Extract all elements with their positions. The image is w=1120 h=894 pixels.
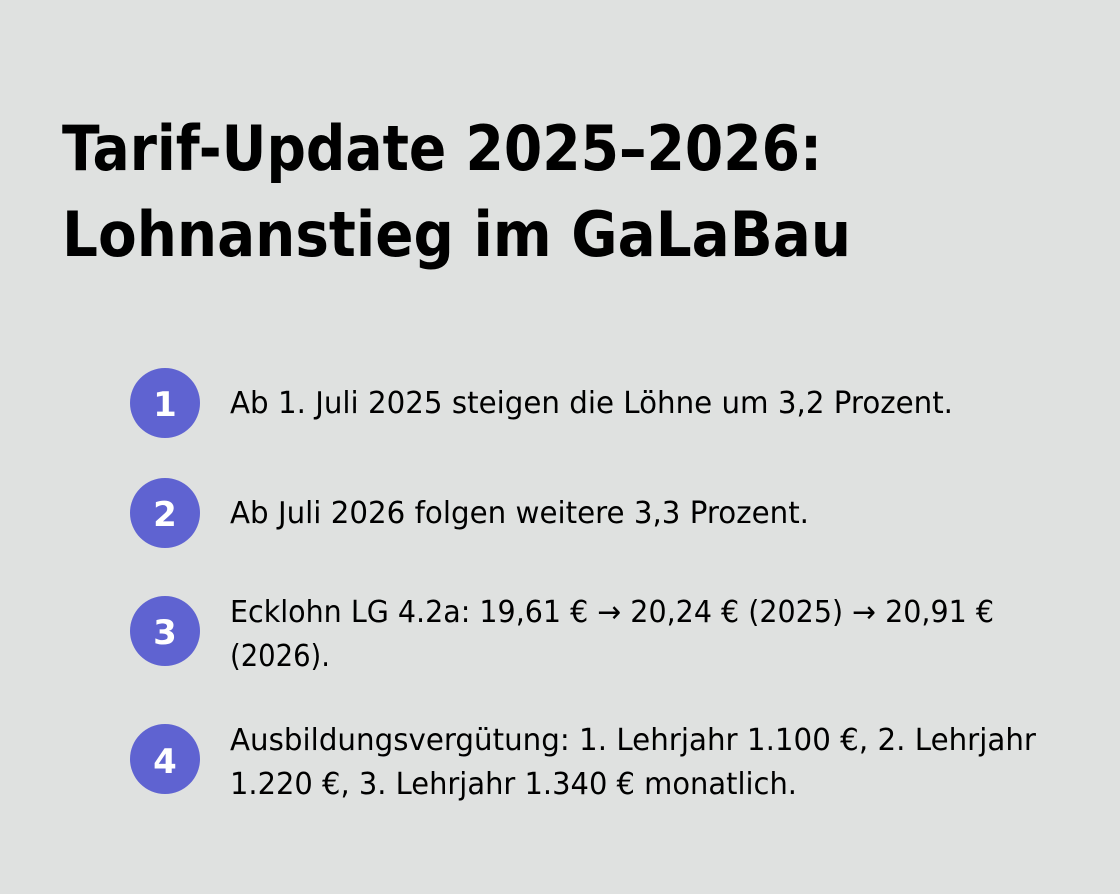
title: Lohnanstieg im GaLaBau bbox=[62, 198, 851, 271]
number badge 1 bbox=[130, 368, 200, 438]
number badge 2: 2 bbox=[153, 495, 177, 535]
title: Tarif-Update 2025–2026: bbox=[62, 112, 822, 185]
item 4 text bbox=[230, 723, 1037, 802]
list item 3 bbox=[130, 595, 994, 674]
number badge 3: 3 bbox=[153, 613, 177, 653]
item 3 text: (2026). bbox=[230, 639, 330, 674]
item 1 text: Ab 1. Juli 2025 steigen die Löhne um 3,2 Prozent. bbox=[230, 386, 953, 421]
item 2 text: Ab Juli 2026 folgen weitere 3,3 Prozent. bbox=[230, 496, 809, 531]
title bbox=[62, 112, 851, 271]
number badge 4: 4 bbox=[153, 742, 177, 782]
item 4 text: 1.220 €, 3. Lehrjahr 1.340 € monatlich. bbox=[230, 767, 797, 802]
number badge 2 bbox=[130, 478, 200, 548]
list item 4 bbox=[130, 723, 1037, 802]
number badge 3 bbox=[130, 596, 200, 666]
item 4 text: Ausbildungsvergütung: 1. Lehrjahr 1.100 €, 2. Lehrjahr bbox=[230, 723, 1037, 758]
number badge 1: 1 bbox=[153, 385, 177, 425]
item 3 text: Ecklohn LG 4.2a: 19,61 € → 20,24 € (2025) → 20,91 € bbox=[230, 595, 994, 630]
list item 2 bbox=[130, 478, 809, 548]
item 3 text bbox=[230, 595, 994, 674]
number badge 4 bbox=[130, 724, 200, 794]
list item 1 bbox=[130, 368, 953, 438]
